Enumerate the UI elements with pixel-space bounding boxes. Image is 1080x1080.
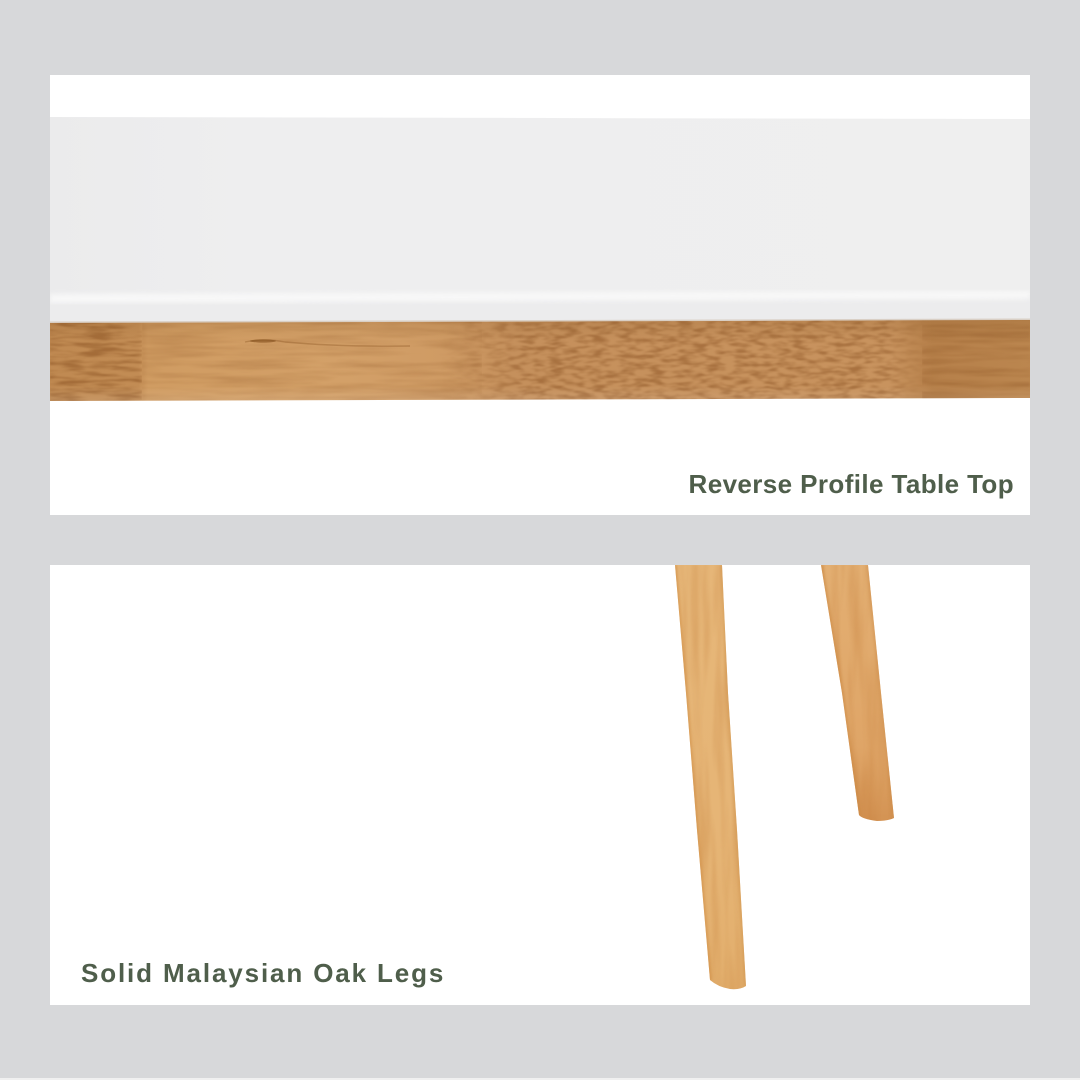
panel: table top bbox=[50, 75, 1030, 515]
panel: legs bbox=[50, 565, 1030, 1005]
back leg bbox=[821, 565, 894, 821]
table top photo bbox=[50, 117, 1030, 401]
label: Reverse Profile Table Top: Reverse Profile Table Top bbox=[689, 469, 1014, 499]
oak legs photo bbox=[675, 565, 894, 990]
bottom edge strip bbox=[0, 1078, 1080, 1080]
label: Solid Malaysian Oak Legs: Solid Malaysian Oak Legs bbox=[81, 958, 445, 988]
front leg bbox=[675, 565, 746, 990]
